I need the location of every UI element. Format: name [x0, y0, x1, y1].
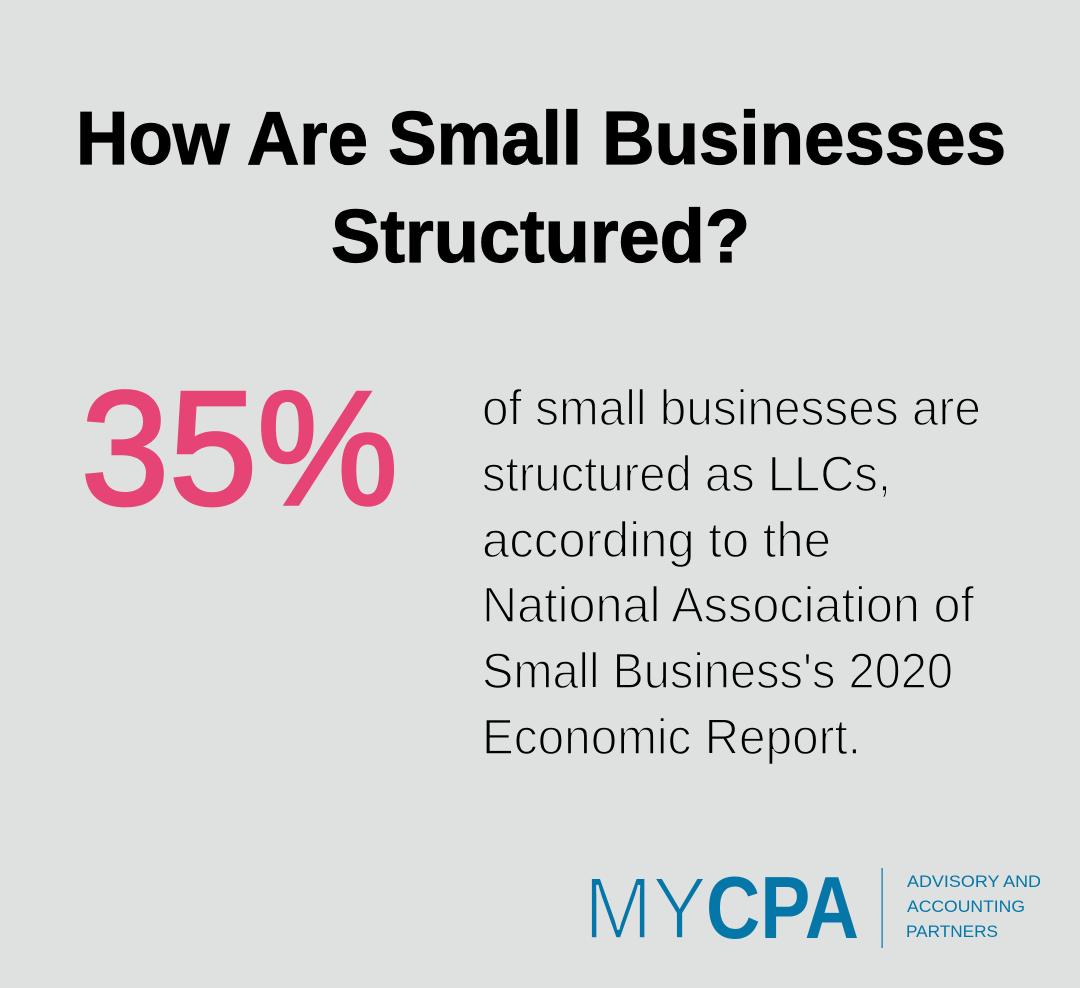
title: How Are Small Businesses [76, 96, 1006, 180]
logo tagline: ADVISORY AND [907, 872, 1041, 891]
logo wordmark MY: MY [584, 858, 707, 958]
logo wordmark CPA: CPA [706, 858, 859, 957]
description text: structured as LLCs, [482, 446, 891, 502]
big statistic: 35%: 35% [81, 358, 398, 539]
title [76, 96, 1006, 278]
logo divider [882, 868, 883, 948]
description text: Small Business's 2020 [482, 643, 953, 699]
title: Structured? [331, 194, 750, 278]
description text: Economic Report. [482, 709, 861, 765]
logo tagline: ACCOUNTING [907, 897, 1025, 916]
description text: National Association of [482, 577, 974, 633]
description text: of small businesses are [482, 380, 981, 436]
description text: according to the [482, 512, 831, 568]
logo tagline [906, 872, 1041, 941]
description text [482, 380, 981, 765]
logo: MYCPA [584, 858, 1041, 958]
logo tagline: PARTNERS [906, 922, 998, 941]
